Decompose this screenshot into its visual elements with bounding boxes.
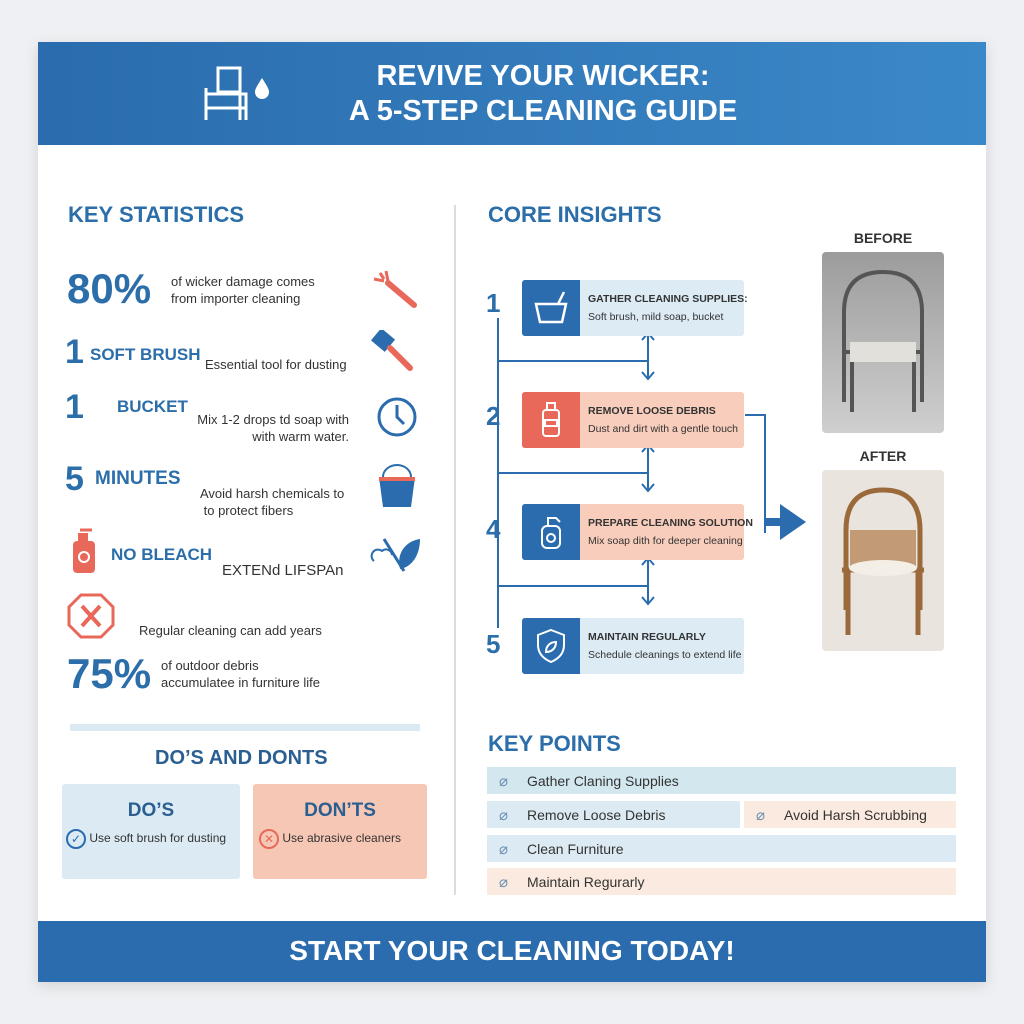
stats list xyxy=(65,265,349,697)
stats list: of wicker damage comes xyxy=(171,274,315,289)
heading: do's and donts: DO’S AND DONTS xyxy=(155,747,328,769)
header banner xyxy=(38,42,986,145)
text: 4 xyxy=(486,514,500,544)
key points list: ⌀ xyxy=(499,841,508,858)
key points list: ⌀ xyxy=(499,807,508,824)
panel: do's: ✓ xyxy=(71,832,81,846)
icon: chair and drop xyxy=(204,66,269,120)
step 2 xyxy=(522,392,744,448)
step 1: Soft brush, mild soap, bucket xyxy=(588,311,723,323)
stats list: 1 xyxy=(65,333,84,371)
key points list: Remove Loose Debris xyxy=(527,807,666,823)
stats list: Mix 1-2 drops td soap with xyxy=(197,412,349,427)
step 2: REMOVE LOOSE DEBRIS xyxy=(588,405,716,417)
heading: key statistics: KEY STATISTICS xyxy=(68,202,244,227)
heading: key points: KEY POINTS xyxy=(488,731,621,756)
panel: donts xyxy=(253,784,427,879)
after photo: AFTER xyxy=(860,448,906,464)
stats list: 1 xyxy=(65,388,84,426)
step 1 xyxy=(522,280,744,336)
stats list: NO BLEACH xyxy=(111,545,212,564)
text: 5 xyxy=(486,629,500,659)
step numbers: 1 xyxy=(486,288,500,318)
panel: donts: DON’TS xyxy=(304,800,376,821)
vertical divider xyxy=(454,205,456,895)
flow diagram xyxy=(497,318,806,628)
panel: do's: Use soft brush for dusting xyxy=(89,831,226,845)
panel: donts: Use abrasive cleaners xyxy=(282,831,401,845)
footer banner: START YOUR CLEANING TODAY! xyxy=(289,935,735,966)
panel: donts: ✕ xyxy=(264,832,274,846)
footer banner xyxy=(38,921,986,982)
icons right column xyxy=(370,270,420,572)
panel: do's: DO’S xyxy=(128,800,174,821)
icon: bottle xyxy=(73,528,95,573)
step 4: Schedule cleanings to extend life xyxy=(588,649,742,661)
step 1: GATHER CLEANING SUPPLIES: xyxy=(588,293,748,305)
icon: clock xyxy=(378,398,416,436)
step 4 xyxy=(522,618,744,674)
step 3: Mix soap dith for deeper cleaning xyxy=(588,535,743,547)
stats list: SOFT BRUSH xyxy=(90,345,200,364)
title: A 5-STEP CLEANING GUIDE xyxy=(349,95,737,127)
heading: core insights: CORE INSIGHTS xyxy=(488,202,662,227)
stats list: from importer cleaning xyxy=(171,291,300,306)
step 4: MAINTAIN REGULARLY xyxy=(588,631,706,643)
stats list: Regular cleaning can add years xyxy=(139,623,322,638)
key points list: Maintain Regurarly xyxy=(527,874,644,890)
text: 2 xyxy=(486,401,500,431)
stats list: BUCKET xyxy=(117,397,188,416)
key points list: Gather Claning Supplies xyxy=(527,773,679,789)
before photo: BEFORE xyxy=(854,230,912,246)
icon: bucket xyxy=(379,464,415,507)
after photo xyxy=(822,448,944,651)
step 3 xyxy=(522,504,744,560)
step 3: PREPARE CLEANING SOLUTION xyxy=(588,517,753,529)
key points list: Clean Furniture xyxy=(527,841,624,857)
stats list: 80% xyxy=(67,265,151,312)
step 2: Dust and dirt with a gentle touch xyxy=(588,423,738,435)
key points list: Avoid Harsh Scrubbing xyxy=(784,807,927,823)
key points list: ⌀ xyxy=(499,773,508,790)
icon: brush xyxy=(371,330,413,371)
icon: scraper xyxy=(374,270,417,308)
stats list: EXTENd LIFSPAn xyxy=(222,562,343,579)
stats list: accumulatee in furniture life xyxy=(161,675,320,690)
before photo xyxy=(822,230,944,433)
icon: stop x xyxy=(68,594,114,638)
stats list: of outdoor debris xyxy=(161,658,259,673)
divider xyxy=(70,724,420,731)
key points list: ⌀ xyxy=(499,874,508,891)
title: REVIVE YOUR WICKER: xyxy=(376,60,710,92)
panel: do's xyxy=(62,784,240,879)
stats list: MINUTES xyxy=(95,468,180,489)
stats list: Essential tool for dusting xyxy=(205,357,347,372)
key points list: ⌀ xyxy=(756,807,765,824)
icon: leaf xyxy=(370,538,420,572)
key points list xyxy=(487,767,956,895)
stats list: Avoid harsh chemicals to xyxy=(200,486,344,501)
stats list: 5 xyxy=(65,460,84,498)
stats list: to protect fibers xyxy=(204,503,293,518)
title xyxy=(349,60,737,127)
stats list: with warm water. xyxy=(252,429,349,444)
stats list: 75% xyxy=(67,650,151,697)
